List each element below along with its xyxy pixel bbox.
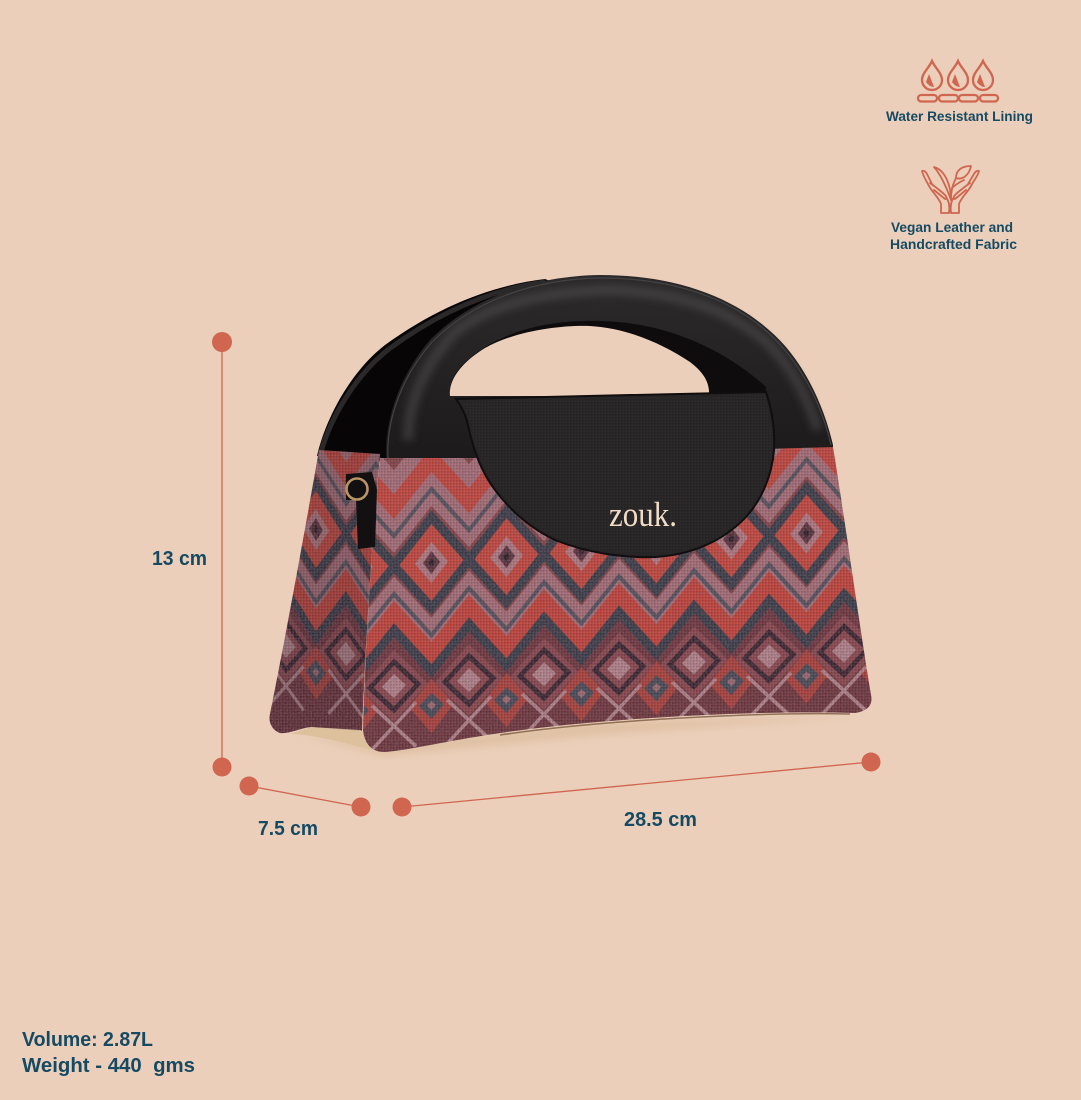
handle sheen: [408, 290, 818, 440]
height top dot: [212, 332, 232, 352]
volume and weight: [22, 1029, 195, 1077]
height label: 13 cm: [152, 547, 207, 570]
side panel fabric: [269, 450, 380, 733]
handle opening: [450, 326, 709, 396]
icon: hands and leaves: [922, 166, 979, 213]
right leaf: [951, 166, 971, 200]
width left dot: [392, 798, 412, 816]
volume and weight: Volume: 2.87L: [22, 1029, 153, 1051]
depth right dot: [352, 798, 370, 816]
bag base lining: [290, 727, 378, 751]
height line: [221, 342, 223, 767]
left leaf: [934, 167, 951, 200]
side panel shade: [269, 450, 380, 733]
floor shadow: [300, 716, 860, 756]
icon: water drops: [918, 61, 998, 102]
width measure: [392, 752, 880, 831]
vegan leather label: Vegan Leather and: [891, 220, 1013, 235]
brand logo: zouk.: [609, 495, 677, 534]
drop two: [948, 61, 968, 90]
height measure: [152, 332, 232, 776]
drop highlights: [926, 74, 985, 87]
flap weave texture: [462, 395, 771, 553]
handle seam: [388, 278, 831, 458]
back handle rim: [321, 282, 545, 452]
depth left dot: [240, 776, 258, 796]
strap and ring: [346, 472, 377, 549]
front handle: [386, 275, 833, 462]
strap: [346, 472, 377, 549]
width line: [402, 762, 871, 807]
front flap: [456, 392, 774, 557]
inner handle opening, dark back: [450, 321, 766, 396]
drop one: [922, 61, 942, 90]
side weave texture: [269, 450, 380, 733]
depth label: 7.5 cm: [258, 817, 318, 840]
side fabric mottling: [269, 450, 380, 733]
vegan leather label: [890, 220, 1018, 252]
front fabric mottling: [363, 447, 871, 752]
base edge: [500, 714, 850, 735]
pills: [918, 95, 998, 102]
right hand: [951, 171, 979, 213]
height bottom dot: [212, 758, 232, 776]
volume and weight: Weight - 440 gms: [22, 1055, 195, 1077]
left hand: [922, 171, 949, 213]
drop three: [973, 61, 993, 90]
ring: [346, 478, 368, 500]
fabric weave texture: [363, 447, 871, 752]
width label: 28.5 cm: [624, 808, 697, 831]
vegan leather label: Handcrafted Fabric: [890, 237, 1018, 252]
depth measure: [240, 776, 370, 840]
handbag: [269, 275, 871, 752]
front panel fabric: [363, 447, 871, 752]
width right dot: [862, 752, 880, 772]
water resistant label: Water Resistant Lining: [886, 109, 1033, 124]
back handle: [317, 279, 790, 462]
depth line: [249, 786, 361, 807]
